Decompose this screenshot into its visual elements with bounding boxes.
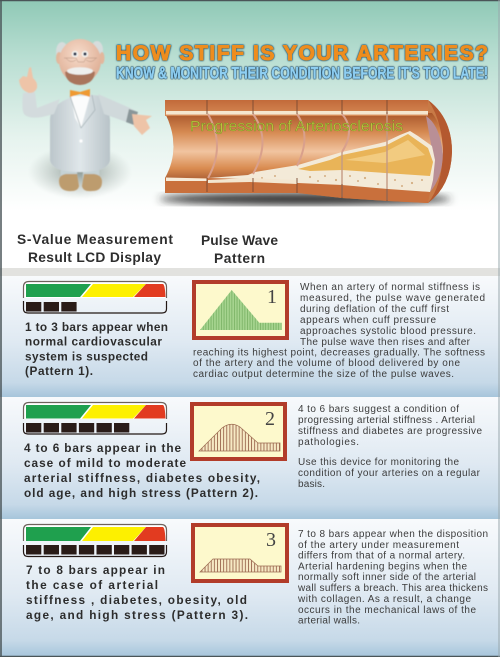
explanation: pattern 3: 7 to 8 bars appear when the disposition <box>298 529 488 540</box>
description: pattern 1: system is suspected <box>25 350 148 364</box>
column heading: pulse wave: Pattern <box>214 251 265 266</box>
explanation: pattern 2: progressing arterial stiffness . Arterial <box>298 415 475 426</box>
explanation: pattern 2: condition of your arteries on a regular <box>298 468 481 479</box>
description: pattern 1: (Pattern 1). <box>25 364 93 378</box>
explanation: pattern 3 <box>297 529 488 626</box>
pulse wave chart 1 <box>194 282 287 338</box>
panel: pattern 2 <box>0 397 500 519</box>
description: pattern 1 <box>25 320 168 378</box>
column heading: LCD display <box>17 232 173 265</box>
explanation: pattern 1: The pulse wave then rises and after <box>300 337 471 348</box>
explanation: pattern 3: with collagen. As a result, a change <box>297 594 471 605</box>
title: HOW STIFF IS YOUR ARTERIES? <box>116 42 488 65</box>
explanation: pattern 1 <box>193 282 485 380</box>
divider band <box>0 268 500 276</box>
description: pattern 3: age, and high stress (Pattern 3). <box>26 608 248 622</box>
pulse wave chart 1: 1 <box>267 286 277 308</box>
pulse wave chart 2: 2 <box>265 408 275 430</box>
pulse wave chart 3 <box>193 525 287 581</box>
description: pattern 3: 7 to 8 bars appear in <box>26 563 165 577</box>
explanation: pattern 1: reaching its highest point, decreases gradually. The softness <box>193 348 485 358</box>
explanation: pattern 2: basis. <box>298 479 325 490</box>
character: doctor <box>19 39 152 199</box>
explanation: pattern 1: measured, the pulse wave generated <box>300 293 485 304</box>
description: pattern 2: 4 to 6 bars appear in the <box>24 441 181 455</box>
explanation: pattern 3: normally soft inner side of the arterial <box>298 572 476 583</box>
column heading: LCD display: S-Value Measurement <box>17 232 173 247</box>
header background <box>0 0 500 230</box>
pulse wave chart 2 <box>192 404 285 459</box>
LCD meter: 6 bars <box>24 402 166 434</box>
explanation: pattern 1: appears when cuff pressure <box>300 315 436 326</box>
explanation: pattern 1: cardiac output determine the size of the pulse waves. <box>193 369 454 380</box>
LCD meter: 3 bars <box>24 282 166 313</box>
explanation: pattern 2: stiffness and diabetes are progressive <box>298 426 482 437</box>
description: pattern 1: 1 to 3 bars appear when <box>25 320 168 334</box>
explanation: pattern 2: pathologies. <box>298 437 359 448</box>
description: pattern 3 <box>26 563 248 622</box>
column heading: pulse wave: Pulse Wave <box>201 233 278 248</box>
explanation: pattern 2 <box>298 404 482 490</box>
explanation: pattern 3: Arterial hardening begins when the <box>298 562 467 572</box>
description: pattern 2: arterial stiffness, diabetes obesity, <box>24 471 260 485</box>
explanation: pattern 1: during deflation of the cuff first <box>300 304 449 315</box>
description: pattern 2 <box>24 441 260 500</box>
description: pattern 3: stiffness , diabetes, obesity, old <box>26 593 247 607</box>
panel: pattern 3 <box>0 519 500 657</box>
explanation: pattern 2: 4 to 6 bars suggest a condition of <box>298 404 459 415</box>
explanation: pattern 3: differs from that of a normal artery. <box>298 550 465 562</box>
explanation: pattern 1: of the artery and the volume of blood delivered by one <box>193 358 460 369</box>
description: pattern 3: the case of arterial <box>26 578 158 592</box>
explanation: pattern 3: occurs in the mechanical laws of the <box>298 605 476 616</box>
LCD meter: 8 bars <box>24 524 166 556</box>
description: pattern 2: old age, and high stress (Pattern 2). <box>24 486 258 500</box>
explanation: pattern 3: wall suffers a breach. This area thickens <box>297 583 488 594</box>
explanation: pattern 3: of the artery under measurement <box>298 540 459 551</box>
explanation: pattern 3: arterial walls. <box>298 616 360 626</box>
explanation: pattern 2: Use this device for monitoring the <box>298 457 459 468</box>
explanation: pattern 1: approaches systolic blood pressure. <box>300 326 476 337</box>
column heading: pulse wave <box>201 233 278 266</box>
description: pattern 2: case of mild to moderate <box>24 456 186 470</box>
panel: pattern 1 <box>0 276 500 397</box>
label: progression of arteriosclerosis: Progression of Arteriosclerosis <box>190 118 403 135</box>
illustration: artery cross-section <box>159 100 452 205</box>
column heading: LCD display: Result LCD Display <box>28 250 161 265</box>
explanation: pattern 1: When an artery of normal stiffness is <box>300 282 480 293</box>
pulse wave chart 3: 3 <box>266 529 276 551</box>
description: pattern 1: normal cardiovascular <box>25 334 162 348</box>
